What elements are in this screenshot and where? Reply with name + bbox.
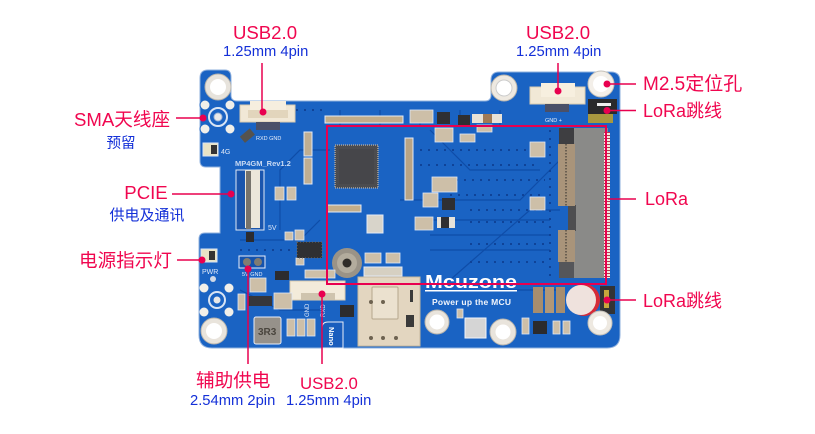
lower left footprint and hole bbox=[200, 276, 234, 344]
callout: USB2.0 bottom: 1.25mm 4pin bbox=[286, 393, 371, 409]
bottom USB connector: RXD bbox=[321, 304, 327, 317]
power inductor 3R3: 3R3 bbox=[258, 327, 277, 338]
power header 2 pin bbox=[239, 256, 265, 278]
mounting holes right and top bbox=[491, 71, 614, 101]
circuit board bbox=[199, 70, 620, 348]
LoRa jumper bottom with capacitor bbox=[566, 284, 615, 335]
callout: M2.5 hole: M2.5定位孔 bbox=[643, 73, 742, 95]
small components left column bbox=[246, 132, 312, 265]
callout: SMA antenna: SMA天线座 bbox=[74, 109, 170, 130]
nano label bbox=[322, 322, 343, 348]
PWR LED and silkscreen bbox=[201, 249, 218, 276]
top left USB connector bbox=[240, 101, 295, 142]
callout: PCIE bbox=[109, 182, 234, 224]
callout: USB2.0 top right: 1.25mm 4pin bbox=[516, 44, 601, 60]
callout: PCIE: PCIE bbox=[124, 182, 168, 203]
mounting hole top left bbox=[205, 74, 231, 100]
callout: power indicator: 电源指示灯 bbox=[79, 250, 172, 271]
callout: LoRa jumper bottom bbox=[604, 291, 722, 311]
Mcuzone logo: Power up the MCU bbox=[432, 297, 511, 307]
callout: auxiliary power bbox=[190, 266, 275, 409]
callout: auxiliary power: 2.54mm 2pin bbox=[190, 393, 275, 409]
callout: LoRa module: LoRa bbox=[645, 189, 689, 209]
PWR LED and silkscreen: PWR bbox=[202, 269, 218, 276]
capacitors bbox=[522, 287, 570, 334]
top right USB connector bbox=[530, 83, 585, 124]
LoRa jumper top bbox=[588, 99, 617, 123]
power inductor 3R3 bbox=[238, 278, 315, 344]
bottom USB connector bbox=[275, 270, 354, 317]
bottom USB connector: GND bbox=[305, 303, 311, 317]
callout: M2.5 hole bbox=[604, 73, 742, 95]
4G LED: 4G bbox=[221, 149, 230, 156]
callout: SMA antenna bbox=[74, 109, 206, 152]
Mcuzone logo bbox=[425, 272, 517, 307]
M.2 LoRa socket bbox=[558, 128, 610, 278]
callout: USB2.0 top right: USB2.0 bbox=[526, 22, 590, 43]
SIM card slot bbox=[358, 277, 420, 346]
callout: PCIE: 供电及通讯 bbox=[109, 207, 185, 224]
bottom mounting holes and pad bbox=[425, 309, 516, 345]
small diagonal chip bbox=[240, 128, 255, 143]
nano label: Nano bbox=[327, 327, 336, 346]
power header 2 pin: 5V GND bbox=[242, 272, 263, 278]
top right USB connector: GND + bbox=[545, 118, 562, 124]
callout: USB2.0 top right bbox=[516, 22, 601, 94]
PCIE flat connector: 5V bbox=[268, 225, 277, 232]
revision silkscreen: MP4GM_Rev1.2 bbox=[235, 159, 291, 168]
small parts row above SIM bbox=[364, 253, 402, 276]
Mcuzone logo: Mcuzone bbox=[425, 272, 517, 292]
callout: USB2.0 top left: 1.25mm 4pin bbox=[223, 44, 308, 60]
callout: LoRa jumper bottom: LoRa跳线 bbox=[643, 291, 722, 311]
callout: auxiliary power: 辅助供电 bbox=[196, 370, 270, 391]
top left USB connector: RXD GND bbox=[256, 136, 281, 142]
SMA antenna footprint bbox=[200, 100, 235, 134]
main microcontroller chip bbox=[335, 145, 378, 188]
LoRa highlight frame bbox=[327, 126, 606, 284]
callout: USB2.0 bottom bbox=[286, 290, 371, 409]
callout: USB2.0 top left bbox=[223, 22, 308, 116]
callout: LoRa module bbox=[608, 189, 689, 209]
board outline bbox=[199, 70, 620, 348]
callout: USB2.0 bottom: USB2.0 bbox=[300, 374, 358, 393]
board traces bbox=[240, 110, 560, 310]
callout: USB2.0 top left: USB2.0 bbox=[233, 22, 297, 43]
PCIE flat connector bbox=[236, 170, 277, 232]
callout: LoRa jumper top bbox=[604, 101, 722, 121]
memory chip bbox=[285, 232, 322, 258]
callout: LoRa jumper top: LoRa跳线 bbox=[643, 101, 722, 121]
standoff screw bbox=[332, 248, 362, 278]
component rows bbox=[325, 110, 545, 233]
callout: SMA antenna: 预留 bbox=[106, 135, 136, 152]
4G LED bbox=[203, 143, 230, 156]
